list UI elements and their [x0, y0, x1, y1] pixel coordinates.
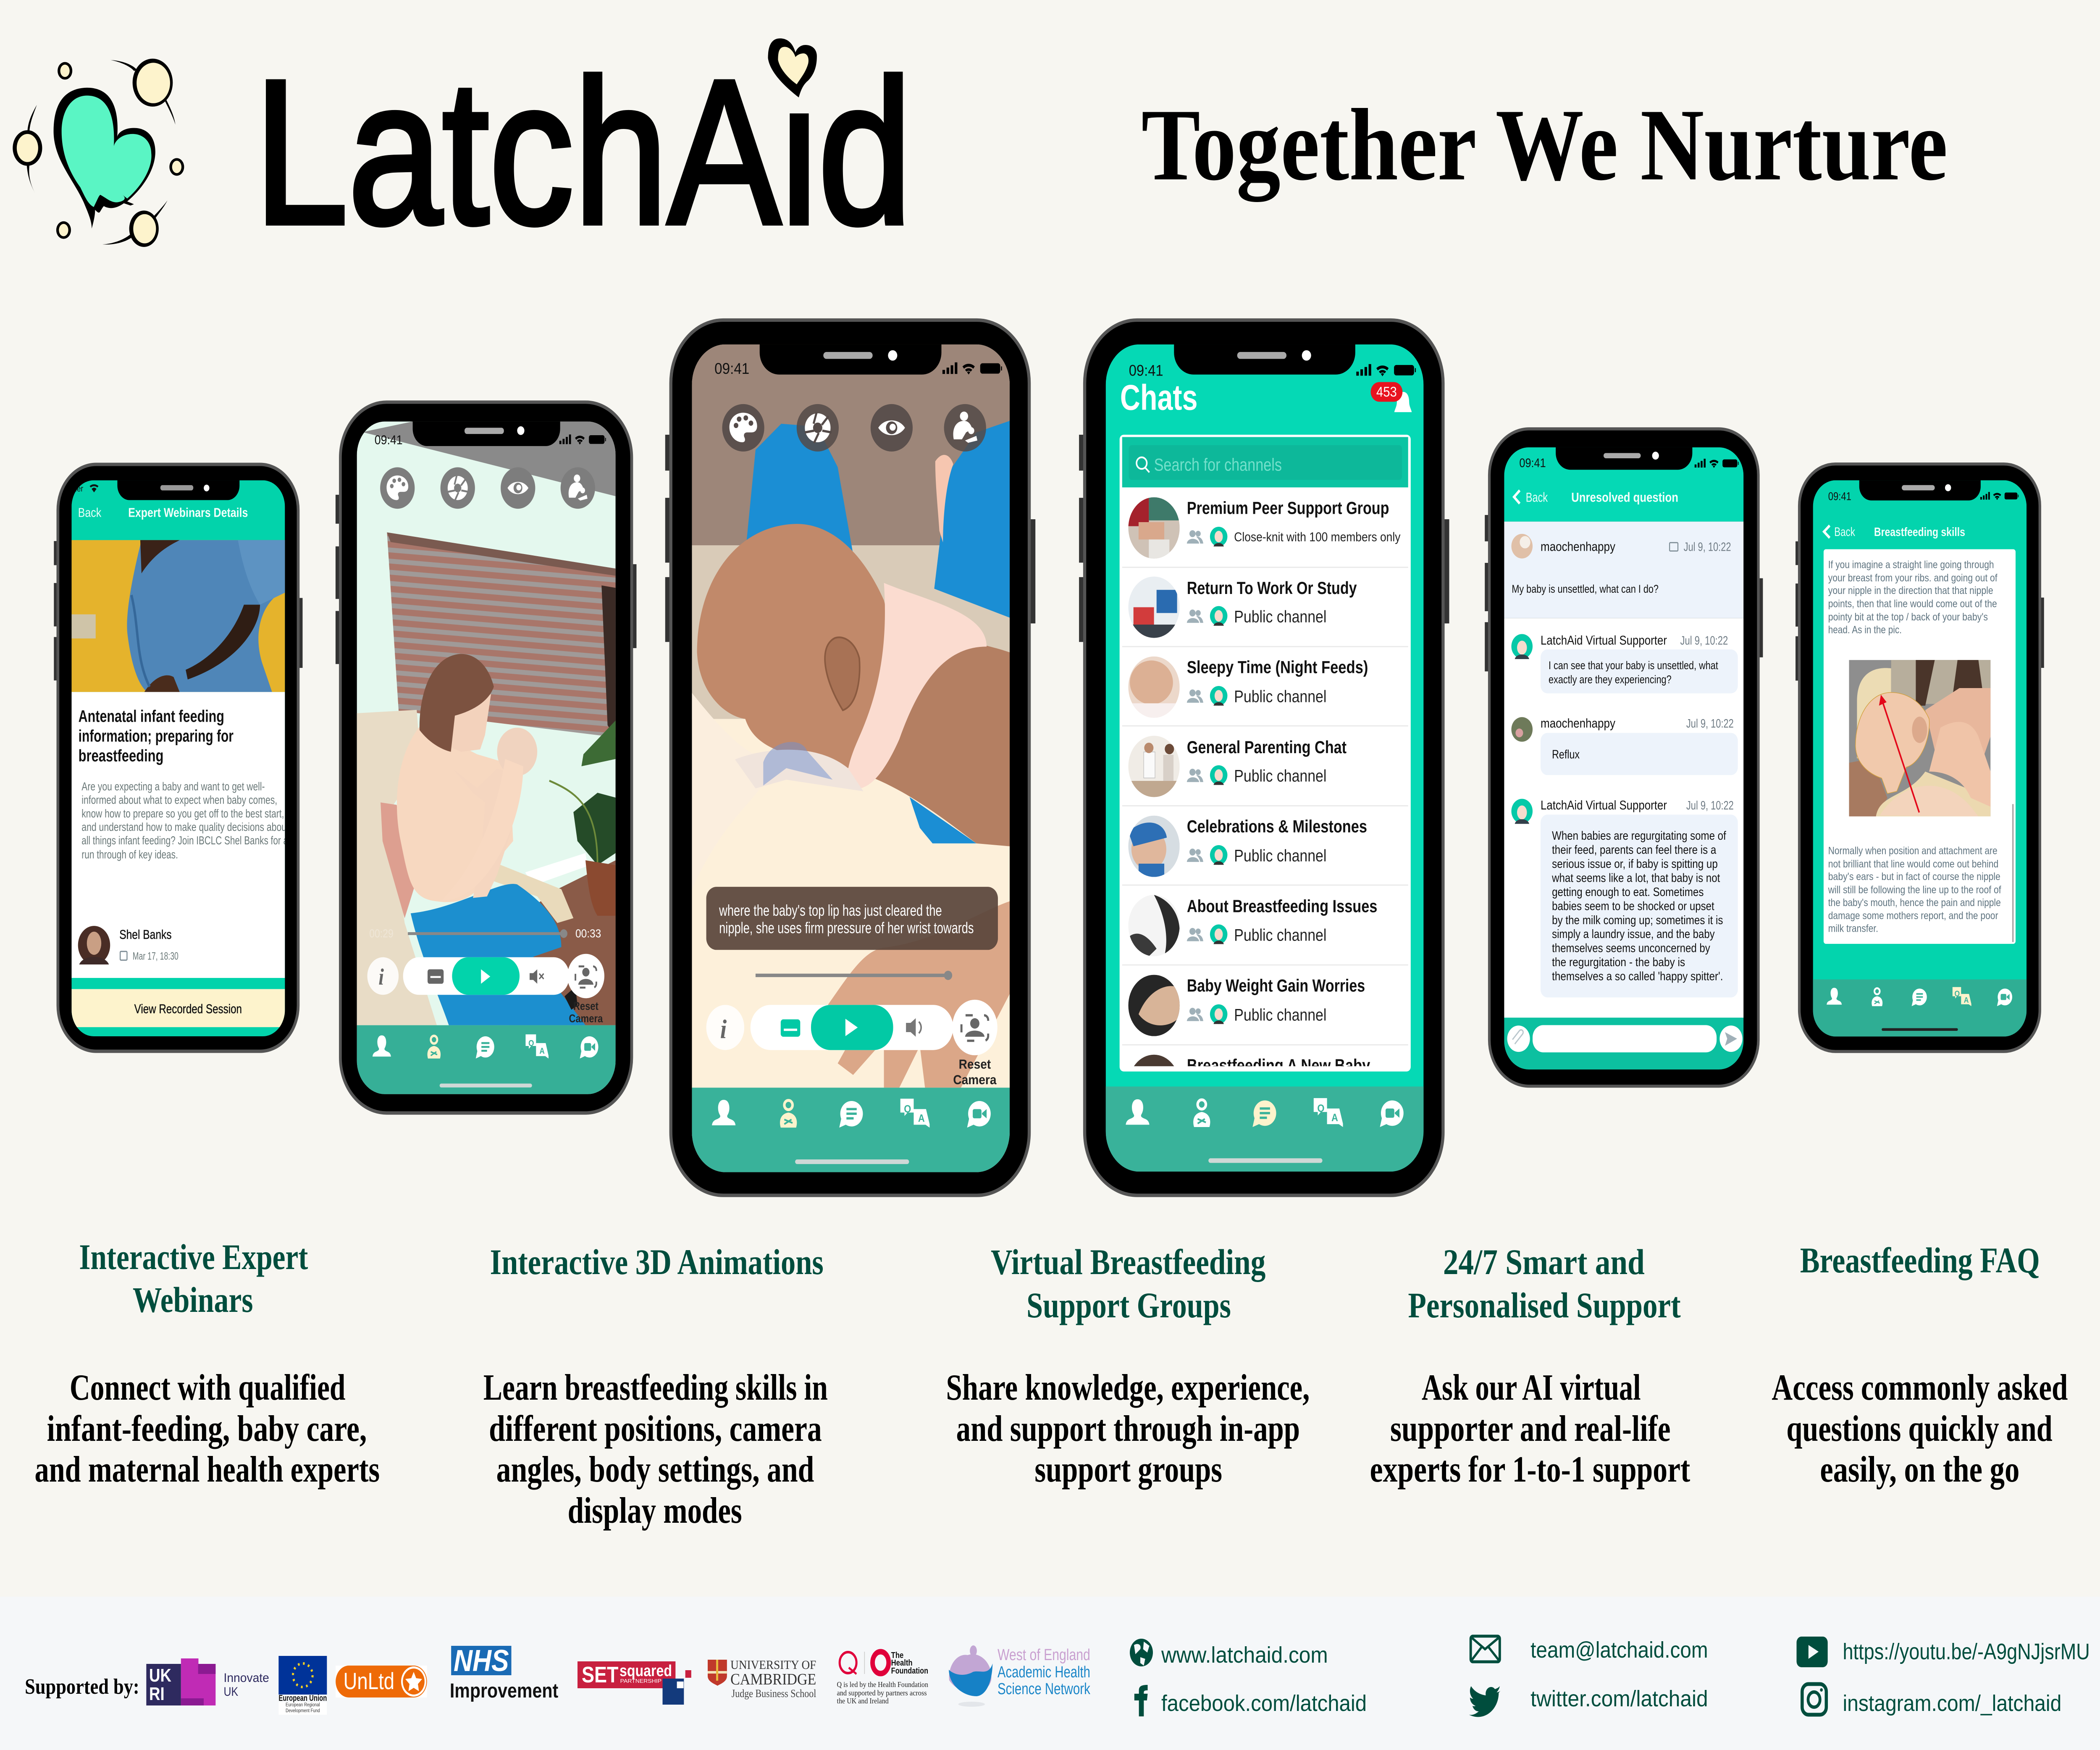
row: celebrations and milestones: Celebrations & Milestones: [1187, 817, 1367, 836]
row: return to work or study: Return To Work Or Study: [1187, 579, 1357, 598]
logo: UnLtd: [336, 1666, 427, 1697]
article continuation: [1828, 845, 2001, 934]
navigation bar: [357, 1025, 616, 1094]
message: virtual supporter 2: the regurgitation - the baby is: [1552, 955, 1685, 969]
logo: UKRI Innovate UK: UK: [149, 1665, 171, 1686]
reset camera label: [569, 1000, 603, 1025]
logo: University of Cambridge Judge Business School: Judge Business School: [732, 1688, 816, 1700]
back: [1514, 490, 1548, 505]
body: Access commonly asked: [1772, 1367, 2068, 1408]
webinar title: breastfeeding: [79, 746, 163, 765]
status: time: 09:41: [375, 433, 403, 447]
message: virtual supporter 2: LatchAid Virtual Supporter: [1541, 798, 1667, 812]
controls: i: [720, 1014, 727, 1044]
row: general parenting chat: Public channel: [1234, 767, 1326, 786]
heading: [991, 1242, 1265, 1326]
navigation bar: A: [1331, 1112, 1338, 1123]
row: celebrations and milestones: Public channel: [1234, 847, 1326, 865]
caption: interactive expert webinars: [35, 1237, 380, 1490]
caption: virtual breastfeeding support groups: [946, 1242, 1310, 1490]
row: about breastfeeding issues: [1122, 895, 1408, 966]
contact: website: [1130, 1639, 1328, 1668]
small hand: [935, 455, 953, 542]
article continuation: damage some mothers report, and the poor: [1828, 910, 1998, 922]
back: Back: [1834, 525, 1855, 539]
date: [120, 950, 178, 962]
teal stripe: [71, 978, 285, 989]
plant: [549, 720, 616, 916]
body: [1772, 1367, 2068, 1490]
message: virtual supporter 2: themselves seems unconcerned by: [1552, 941, 1711, 955]
webinar description: know how to prepare so you get off to the best start,: [81, 807, 284, 820]
row: baby weight gain worries: Public channel: [1234, 1006, 1326, 1025]
contact: website: www.latchaid.com: [1161, 1642, 1328, 1668]
status text: ier: [75, 484, 84, 494]
article image: latch line: [1849, 660, 1990, 816]
body: easily, on the go: [1820, 1449, 2019, 1490]
back: Back: [1526, 490, 1548, 505]
question panel: My baby is unsettled, what can I do?: [1512, 583, 1659, 595]
scene base: [692, 344, 1010, 1172]
navigation bar: A: [539, 1046, 545, 1056]
heading: Interactive Expert: [79, 1237, 308, 1277]
status: time: 09:41: [1828, 490, 1851, 503]
row: baby weight gain worries: Baby Weight Gain Worries: [1187, 977, 1365, 996]
heading: Breastfeeding FAQ: [1800, 1240, 2040, 1281]
notification badge: [1370, 382, 1402, 402]
mother's arm: [848, 583, 987, 789]
navigation bar: [1813, 980, 2026, 1037]
search field: Search for channels: [1154, 455, 1282, 475]
message: virtual supporter 2: themselves a so called 'happy spitter'.: [1552, 970, 1723, 983]
body: angles, body settings, and: [496, 1449, 814, 1490]
body: Share knowledge, experience,: [946, 1367, 1310, 1408]
tagline: Together We Nurture: [1142, 88, 1948, 202]
article continuation: Normally when position and attachment are: [1828, 845, 1998, 857]
logo: Q and The Health Foundation: Health: [891, 1658, 913, 1667]
logo: West of England AHSN: [949, 1645, 1090, 1707]
logo: SETsquared: squared: [620, 1662, 672, 1680]
mother's breast and lap: [692, 774, 1010, 1088]
row: return to work or study: Public channel: [1234, 607, 1326, 626]
message: maochenhappy: maochenhappy: [1541, 716, 1616, 731]
logo: Q and The Health Foundation: [837, 1650, 929, 1705]
message: maochenhappy: Jul 9, 10:22: [1686, 717, 1734, 730]
row: about breastfeeding issues: About Breastfeeding Issues: [1187, 897, 1377, 916]
row: sleepy time: [1122, 657, 1408, 726]
logo: UKRI Innovate UK: RI: [149, 1683, 165, 1704]
navigation bar: Q: [1317, 1103, 1324, 1114]
body: display modes: [568, 1490, 742, 1531]
phones 3 and 4: [665, 320, 1449, 1196]
reset camera label: Camera: [569, 1013, 603, 1025]
message: virtual supporter 1: [1511, 633, 1738, 694]
contact: instagram: instagram.com/_latchaid: [1843, 1690, 2061, 1716]
logo: UKRI Innovate UK: UK: [223, 1684, 239, 1699]
ear: [825, 637, 860, 710]
notification badge: 453: [1376, 384, 1397, 399]
body: support groups: [1034, 1449, 1222, 1490]
webinar description: [81, 780, 289, 861]
logo: European Union: European Union: [278, 1693, 327, 1703]
phone: 3D animation close view: [665, 320, 1035, 1196]
webinar title: information; preparing for: [79, 727, 234, 745]
body: questions quickly and: [1786, 1408, 2053, 1449]
logo: SETsquared: SET: [582, 1662, 619, 1687]
notch: [1859, 480, 1981, 500]
message: virtual supporter 2: Jul 9, 10:22: [1686, 799, 1734, 812]
top tool icons: [722, 404, 986, 452]
button: view recorded session: View Recorded Session: [134, 1002, 242, 1017]
article continuation: baby's ears - but in fact of course the nipple: [1828, 871, 2000, 883]
navigation bar: [1106, 1087, 1423, 1172]
message: virtual supporter 2: [1511, 798, 1738, 997]
navigation bar: Q: [528, 1039, 534, 1048]
contact: email: [1471, 1636, 1708, 1663]
row: general parenting chat: [1122, 736, 1408, 807]
row: sleepy time: Sleepy Time (Night Feeds): [1187, 658, 1368, 677]
logo: SETsquared: [578, 1661, 691, 1705]
button: view recorded session: [71, 989, 285, 1027]
logo: University of Cambridge Judge Business School: [708, 1658, 816, 1700]
heading: Support Groups: [1026, 1285, 1231, 1326]
navigation bar: Q: [904, 1103, 911, 1115]
contact: email: team@latchaid.com: [1530, 1637, 1708, 1663]
webinar description: and understand how to make quality decisions about: [81, 821, 289, 833]
logo: UKRI Innovate UK: [146, 1658, 269, 1705]
reset camera label: Reset: [959, 1057, 991, 1072]
status: time: 09:41: [714, 360, 749, 378]
date: Mar 17, 18:30: [133, 950, 178, 962]
message: virtual supporter 2: by the milk coming up; sometimes it is: [1552, 913, 1723, 927]
scrub bar: [369, 928, 601, 940]
reset camera label: Camera: [953, 1073, 997, 1087]
logo: University of Cambridge Judge Business School: CAMBRIDGE: [730, 1670, 816, 1688]
notch: [760, 344, 941, 375]
header title: Breastfeeding skills: [1874, 525, 1965, 539]
article intro: If you imagine a straight line going through: [1828, 559, 1994, 570]
question panel: Jul 9, 10:22: [1684, 540, 1731, 554]
contact: instagram: [1802, 1684, 2061, 1716]
message: maochenhappy: Reflux: [1552, 748, 1580, 761]
contact: twitter: twitter.com/latchaid: [1530, 1686, 1708, 1711]
article intro: pointy bit at the top / back of your baby's: [1828, 611, 1988, 623]
question panel: [1504, 522, 1743, 618]
row: breastfeeding a new baby: Breastfeeding A New Baby: [1187, 1056, 1370, 1075]
body: [35, 1367, 380, 1490]
top tool icons: [380, 467, 595, 509]
notification bell: [1394, 392, 1412, 412]
webinar description: Are you expecting a baby and want to get well-: [81, 780, 265, 793]
reset camera label: [953, 1057, 997, 1087]
status icons: [1980, 492, 2019, 500]
hand below: [827, 901, 1010, 1088]
article intro: your nipple in the direction that that nipple: [1828, 585, 1993, 596]
logo wordmark: LatchAid: [254, 38, 912, 267]
caption: interactive 3D animations: [483, 1242, 828, 1531]
caption box: [706, 887, 998, 950]
wifi: [89, 484, 98, 492]
navigation bar: Q: [1955, 989, 1960, 998]
webinar description: informed about what to expect when baby comes,: [81, 794, 277, 807]
article continuation: milk transfer.: [1828, 922, 1878, 934]
message: virtual supporter 2: getting enough to eat. Sometimes: [1552, 885, 1704, 899]
row: breastfeeding a new baby: [1128, 1055, 1370, 1116]
logo: Q and The Health Foundation: The: [891, 1650, 903, 1660]
logo: NHS Improvement: [450, 1644, 558, 1702]
article continuation: not brilliant that line would come out behind: [1828, 858, 1998, 870]
body: different positions, camera: [489, 1408, 822, 1449]
logo: UKRI Innovate UK: Innovate: [223, 1671, 269, 1685]
article intro: [1828, 559, 1998, 636]
mother's arm: [441, 759, 523, 901]
notch: [1174, 344, 1355, 375]
notch: [117, 480, 239, 500]
row: premium peer support group: Premium Peer Support Group: [1187, 499, 1389, 518]
heading: 24/7 Smart and: [1443, 1242, 1645, 1282]
header title: Unresolved question: [1571, 490, 1678, 505]
message: virtual supporter 2: babies seem to be shocked or upset: [1552, 899, 1714, 913]
body: Learn breastfeeding skills in: [483, 1367, 828, 1408]
message: maochenhappy: [1511, 716, 1738, 775]
status: time: 09:41: [1519, 456, 1546, 470]
caption box: nipple, she uses firm pressure of her wrist towards: [719, 920, 974, 937]
logo: European Union: Development Fund: [286, 1708, 320, 1713]
logo: NHS Improvement: Improvement: [450, 1680, 558, 1702]
webinar title: Antenatal infant feeding: [79, 707, 224, 725]
row: about breastfeeding issues: Public channel: [1234, 926, 1326, 945]
body: Ask our AI virtual: [1422, 1367, 1641, 1408]
logo: UnLtd: UnLtd: [344, 1668, 394, 1694]
phone: chats: [1079, 320, 1449, 1196]
row: premium peer support group: Close-knit with 100 members only: [1234, 530, 1401, 544]
floor and skirting: [509, 853, 616, 1025]
presenter avatar: [78, 926, 110, 964]
webinar details card: [71, 692, 285, 978]
body: [1370, 1367, 1690, 1490]
chair: [357, 710, 573, 1025]
logo: European Union: [278, 1656, 327, 1715]
icon: heart above i: [768, 38, 817, 97]
channel card: [1120, 435, 1411, 1072]
controls: [706, 1000, 998, 1055]
blue legs: [730, 421, 1010, 843]
message: virtual supporter 1: LatchAid Virtual Supporter: [1541, 633, 1667, 648]
message: virtual supporter 2: When babies are regurgitating some of: [1552, 829, 1726, 842]
controls: [367, 954, 604, 998]
logo: NHS Improvement: NHS: [454, 1644, 509, 1678]
phone: breastfeeding FAQ: [1796, 464, 2044, 1051]
status icons: [1695, 459, 1739, 468]
row: baby weight gain worries: [1122, 975, 1408, 1046]
phone: smart support chat: [1485, 429, 1763, 1086]
navigation bar: [692, 1088, 1010, 1172]
message input bar: [1504, 1018, 1743, 1069]
caption box: where the baby's top lip has just cleared the: [719, 902, 942, 919]
status icons: [942, 363, 1002, 375]
message: virtual supporter 1: exactly are they experiencing?: [1549, 673, 1672, 686]
phones 1 and 2: [54, 402, 636, 1113]
phones 5 and 6: [1485, 429, 2044, 1086]
baby: [453, 728, 537, 898]
status icons: [559, 434, 606, 444]
message: virtual supporter 2: what seems like a lot, that baby is not: [1551, 871, 1720, 885]
article intro: points, then that line would come out of the: [1828, 598, 1997, 610]
article card: [1824, 549, 2016, 944]
body: supporter and real-life: [1390, 1408, 1670, 1449]
message: virtual supporter 2: simply a laundry issue, and the baby: [1552, 928, 1715, 941]
footer band: [0, 1597, 2100, 1750]
scrollbar: [2012, 804, 2013, 942]
mother: [397, 654, 585, 1025]
logo: Q and The Health Foundation: Q is led by the Health Foundation: [837, 1680, 929, 1689]
webinar title: [79, 707, 234, 765]
contact: facebook: facebook.com/latchaid: [1161, 1690, 1367, 1716]
question panel: maochenhappy: [1541, 540, 1616, 554]
heading: Virtual Breastfeeding: [991, 1242, 1265, 1282]
body: Connect with qualified: [70, 1367, 345, 1408]
article continuation: the baby's mouth, hence the pain and nipple: [1828, 896, 2001, 908]
article continuation: will still be following the line up to the roof of: [1828, 884, 2001, 896]
message: virtual supporter 2: serious issue or, if baby is spitting up: [1552, 857, 1718, 870]
scrub bar: [756, 971, 952, 980]
heading: [79, 1237, 308, 1320]
logo: West of England AHSN: Academic Health: [998, 1663, 1090, 1681]
logo: Q and The Health Foundation: the UK and Ireland: [837, 1697, 889, 1705]
body: [483, 1367, 828, 1531]
status: time: 09:41: [1129, 362, 1163, 379]
message: virtual supporter 1: Jul 9, 10:22: [1680, 634, 1728, 647]
baby's head: [697, 524, 891, 768]
heading: [1408, 1242, 1681, 1326]
navigation bar: A: [918, 1112, 925, 1124]
message: virtual supporter 1: I can see that your baby is unsettled, what: [1549, 660, 1718, 672]
heading: Personalised Support: [1408, 1285, 1681, 1326]
article intro: head. As in the pic.: [1828, 624, 1902, 636]
message: virtual supporter 2: their feed, parents can feel there is a: [1552, 843, 1717, 857]
phone: expert webinars: [54, 464, 302, 1051]
chats heading: Chats: [1120, 378, 1198, 418]
caption: smart and personalised support: [1370, 1242, 1690, 1490]
thread background: [1504, 618, 1743, 1018]
logo: West of England AHSN: Science Network: [998, 1680, 1090, 1698]
heading: Interactive 3D Animations: [490, 1242, 824, 1282]
contact: youtube: https://youtu.be/-A9gNJjsrMU: [1843, 1639, 2090, 1664]
row: general parenting chat: General Parenting Chat: [1187, 738, 1347, 757]
reset camera label: Reset: [573, 1000, 598, 1012]
presenter name: Shel Banks: [119, 928, 172, 942]
body: infant-feeding, baby care,: [47, 1408, 367, 1449]
navigation bar: A: [1964, 996, 1969, 1004]
scrub bar: 00:29: [369, 928, 394, 940]
article intro: your breast from your ribs. and going out of: [1828, 572, 1998, 583]
row: sleepy time: Public channel: [1234, 688, 1326, 706]
body: [946, 1367, 1310, 1490]
body: and maternal health experts: [35, 1449, 380, 1490]
logo: West of England AHSN: West of England: [998, 1646, 1090, 1664]
logo: Q and The Health Foundation: Foundation: [891, 1666, 928, 1675]
heading: Webinars: [133, 1280, 253, 1320]
logo: University of Cambridge Judge Business School: UNIVERSITY OF: [730, 1658, 816, 1672]
webinar description: all things infant feeding? Join IBCLC Shel Banks for a: [81, 834, 289, 847]
scrub bar: 00:33: [575, 928, 601, 940]
back: [1824, 525, 1855, 539]
baby's body and mother's torso: [864, 617, 1010, 846]
latch detail: [735, 750, 864, 791]
logo: European Union: European Regional: [286, 1702, 320, 1708]
contact: facebook: [1134, 1685, 1367, 1716]
search field: [1122, 437, 1408, 487]
blinds: [387, 532, 616, 737]
notch: [1556, 447, 1692, 470]
phone: 3D animation side view: [336, 402, 636, 1113]
status icons: [1356, 364, 1416, 376]
chair band: [692, 545, 1010, 719]
row: celebrations and milestones: [1122, 816, 1408, 886]
floor background: [692, 344, 1010, 553]
contact: twitter: [1469, 1686, 1708, 1717]
row: return to work or study: [1122, 577, 1408, 647]
webinar photo: [71, 540, 285, 692]
row: premium peer support group: [1122, 497, 1408, 568]
body: experts for 1-to-1 support: [1370, 1449, 1690, 1490]
logo icon: heart with bubbles: [13, 59, 184, 247]
logo: Q and The Health Foundation: and supported by partners across: [837, 1689, 927, 1697]
cover for the i dot: [782, 71, 816, 113]
header back: Back: [78, 505, 102, 520]
webinar description: run through of key ideas.: [81, 849, 178, 861]
supported by label: Supported by:: [25, 1674, 139, 1699]
header title: Expert Webinars Details: [128, 505, 248, 520]
body: and support through in-app: [956, 1408, 1300, 1449]
logo: SETsquared: PARTNERSHIP: [620, 1678, 662, 1684]
notch: [413, 421, 560, 446]
controls: i: [378, 964, 384, 990]
caption: breastfeeding FAQ: [1772, 1240, 2068, 1490]
